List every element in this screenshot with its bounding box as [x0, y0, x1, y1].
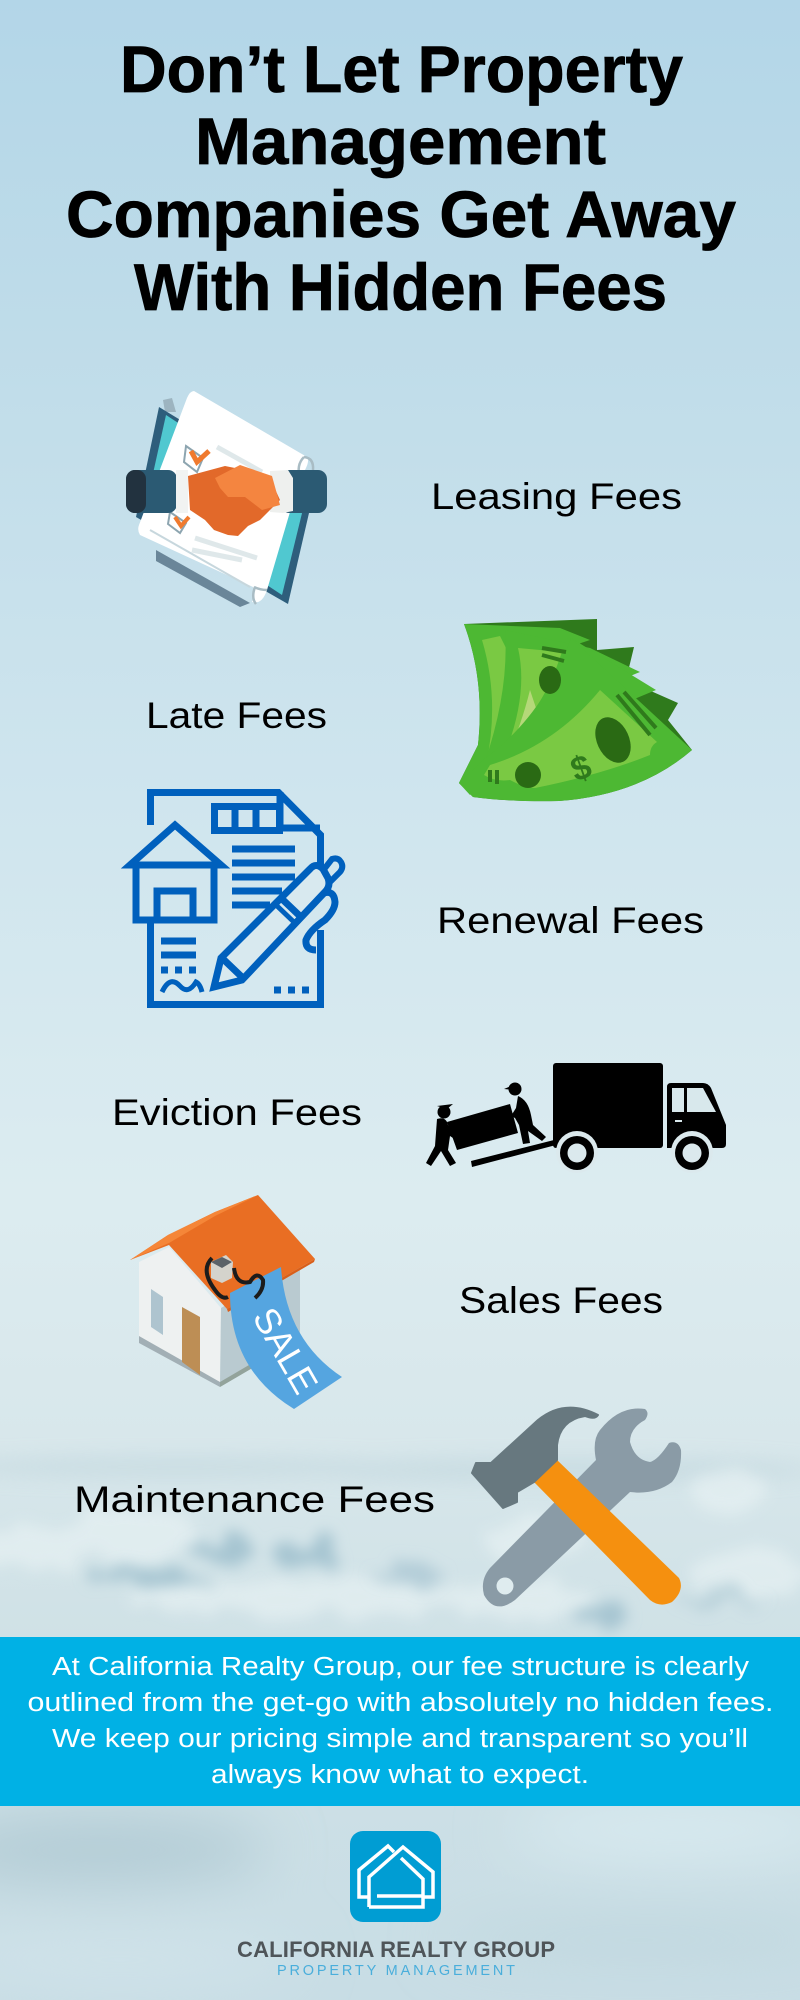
- title: With Hidden Fees: [134, 250, 667, 324]
- banner text: always know what to expect.: [211, 1761, 589, 1789]
- title: [66, 32, 736, 324]
- icon: wrench and hammer: [472, 1408, 681, 1606]
- title: Management: [195, 104, 606, 178]
- banner: closing statement: [0, 1637, 800, 1806]
- icon: house with sale tag: [130, 1195, 342, 1409]
- label: Maintenance Fees: Maintenance Fees: [74, 1479, 435, 1520]
- banner text: outlined from the get-go with absolutely no hidden fees.: [28, 1689, 774, 1717]
- label: Late Fees: Late Fees: [146, 695, 327, 736]
- title: Don’t Let Property: [120, 32, 683, 106]
- label: Leasing Fees: Leasing Fees: [431, 476, 682, 517]
- logo tagline: PROPERTY MANAGEMENT: [277, 1963, 515, 1979]
- icon: moving truck with two movers: [426, 1063, 726, 1173]
- icon: fan of dollar bills: [459, 619, 692, 801]
- icon: handshake over contract: [126, 391, 327, 607]
- label: Renewal Fees: Renewal Fees: [437, 900, 704, 941]
- icon: house document with pen: [130, 792, 342, 1004]
- icon: house with sale tag: SALE: [245, 1300, 326, 1401]
- icon: company logo: [350, 1831, 441, 1922]
- title: Companies Get Away: [66, 177, 736, 251]
- icon: fan of dollar bills: $: [566, 747, 597, 790]
- label: Sales Fees: Sales Fees: [459, 1280, 663, 1321]
- banner text: We keep our pricing simple and transparent so you’ll: [52, 1725, 748, 1753]
- banner text: [28, 1653, 774, 1789]
- banner text: At California Realty Group, our fee structure is clearly: [52, 1653, 749, 1681]
- logo wordmark: CALIFORNIA REALTY GROUP: [237, 1937, 555, 1962]
- label: Eviction Fees: Eviction Fees: [112, 1092, 362, 1133]
